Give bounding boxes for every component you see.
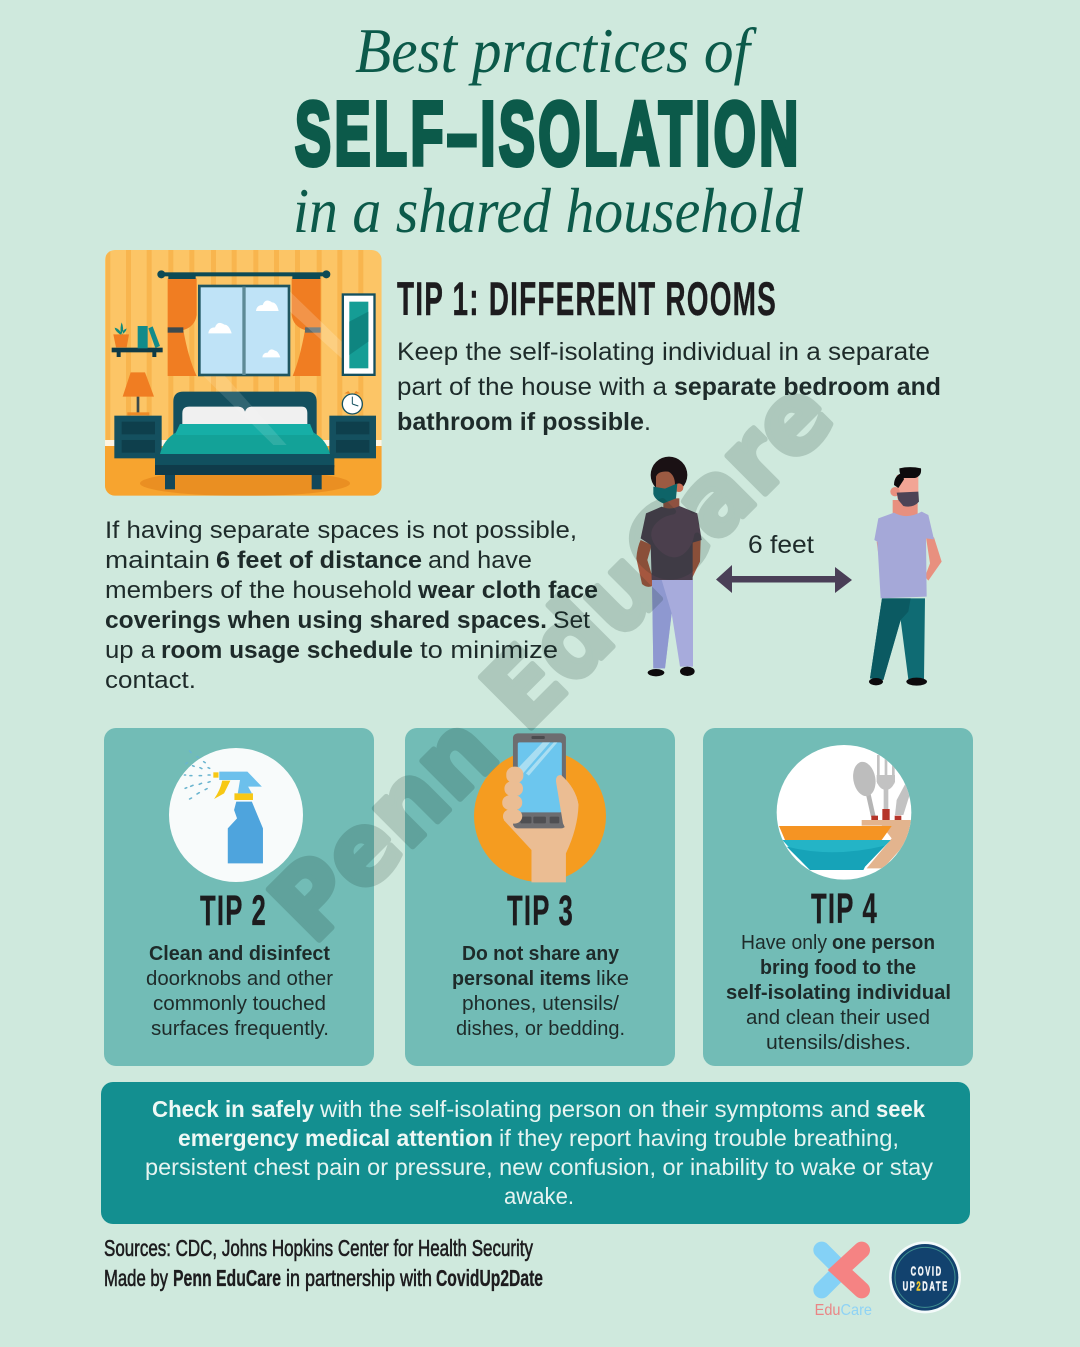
panel: check in safely banner [101, 1082, 970, 1224]
clock [344, 391, 360, 394]
text: tip 3: phones, utensils/ [462, 992, 619, 1015]
text: tip 4: bring food to the [760, 956, 916, 979]
lamp [123, 372, 154, 397]
arrow: double headed distance [716, 565, 852, 593]
tip 1 text: part of the house with a [397, 373, 667, 401]
title line: in a shared household: in a shared household [293, 175, 804, 246]
text: tip 3: dishes, or bedding. [456, 1017, 625, 1040]
banner text: emergency medical attention [178, 1125, 493, 1151]
curtains [168, 278, 197, 376]
icon: spray bottle [169, 748, 303, 882]
text: tip 4: and clean their used [746, 1006, 930, 1029]
banner text: Check in safely [152, 1096, 314, 1122]
label: 6 feet: 6 feet [748, 531, 814, 559]
heading: tip 4: TIP 4 [811, 885, 878, 933]
text: tip 2 [146, 942, 333, 1040]
tip 1 text: bathroom if possible [397, 408, 644, 436]
person with beard, right [869, 467, 942, 686]
shared spaces text [105, 517, 598, 694]
illustration: bedroom [105, 250, 382, 496]
shared spaces text: and have [428, 547, 532, 574]
banner text: persistent chest pain or pressure, new confusion, or inability to wake or stay [145, 1154, 934, 1180]
logo: Covid Up2Date: COVID [911, 1266, 943, 1279]
title line: SELF-ISOLATION: SELF–ISOLATION [295, 83, 802, 184]
panel: tip 3 [405, 728, 675, 1066]
banner text [145, 1096, 934, 1209]
shared spaces text: wear cloth face [417, 577, 598, 604]
picture [342, 293, 376, 376]
text: tip 2: doorknobs and other [146, 967, 333, 990]
title line: Best practices of: Best practices of [355, 15, 758, 86]
text: tip 4: Have only [741, 931, 828, 954]
tip 1 text [397, 338, 941, 436]
sources and credits: in partnership with [286, 1265, 432, 1291]
heading: tip 2: TIP 2 [200, 887, 267, 935]
sources and credits: Penn EduCare [173, 1265, 281, 1291]
shared spaces text: coverings when using shared spaces. [105, 607, 547, 634]
watermark: Penn EduCare: Penn EduCare [249, 358, 855, 963]
text: tip 4: one person [832, 931, 935, 954]
text: tip 4 [726, 931, 951, 1054]
banner text: if they report having trouble breathing, [499, 1125, 899, 1151]
icon: hand holding phone [474, 733, 606, 882]
shared spaces text: If having separate spaces is not possible, [105, 517, 577, 544]
text: tip 3: personal items [452, 967, 591, 990]
sources and credits: Sources: CDC, Johns Hopkins Center for Health Security [104, 1235, 533, 1261]
shared spaces text: contact. [105, 667, 196, 694]
logo: Covid Up2Date [889, 1241, 961, 1313]
sources and credits: CovidUp2Date [436, 1265, 543, 1291]
sources and credits [104, 1235, 543, 1291]
text: tip 3 [452, 942, 629, 1040]
shared spaces text: up a [105, 637, 156, 664]
nightstands [114, 416, 376, 458]
logo: EduCare: EduCare [815, 1302, 872, 1319]
shared spaces text: 6 feet of distance [216, 547, 422, 574]
shared spaces text: maintain [105, 547, 210, 574]
title [293, 15, 804, 246]
banner text: with the self-isolating person on their symptoms and [319, 1096, 870, 1122]
logo: Covid Up2Date: UP2DATE [903, 1281, 949, 1294]
text: tip 2: Clean and disinfect [149, 942, 330, 965]
tip 1 heading: TIP 1: DIFFERENT ROOMS [397, 272, 777, 325]
logo: EduCare [815, 1250, 872, 1319]
icon: bowls and cutlery [777, 745, 913, 880]
text: tip 2: commonly touched [153, 992, 326, 1015]
text: tip 3: like [596, 967, 629, 990]
text: tip 4: self-isolating individual [726, 981, 951, 1004]
shared spaces text: members of the household [105, 577, 412, 604]
shared spaces text: to minimize [420, 637, 558, 664]
shared spaces text: Set [553, 607, 590, 634]
tip 1 text: separate bedroom and [674, 373, 941, 401]
panel: tip 4 [703, 728, 973, 1066]
tip 1 text: Keep the self-isolating individual in a separate [397, 338, 930, 366]
banner text: awake. [504, 1183, 574, 1209]
text: tip 3: Do not share any [462, 942, 620, 965]
text: tip 4: utensils/dishes. [766, 1031, 911, 1054]
tip 1 text: . [644, 408, 651, 436]
panel: tip 2 [104, 728, 374, 1066]
banner text: seek [876, 1096, 925, 1122]
shelf [112, 348, 163, 352]
person with mask, left [636, 457, 702, 676]
sources and credits: Made by [104, 1265, 168, 1291]
bed [173, 392, 317, 435]
light beam [203, 376, 287, 445]
text: tip 2: surfaces frequently. [151, 1017, 329, 1040]
illustration: two people six feet apart [636, 457, 942, 686]
window [199, 286, 289, 375]
heading: tip 3: TIP 3 [507, 887, 574, 935]
shared spaces text: room usage schedule [161, 637, 413, 664]
